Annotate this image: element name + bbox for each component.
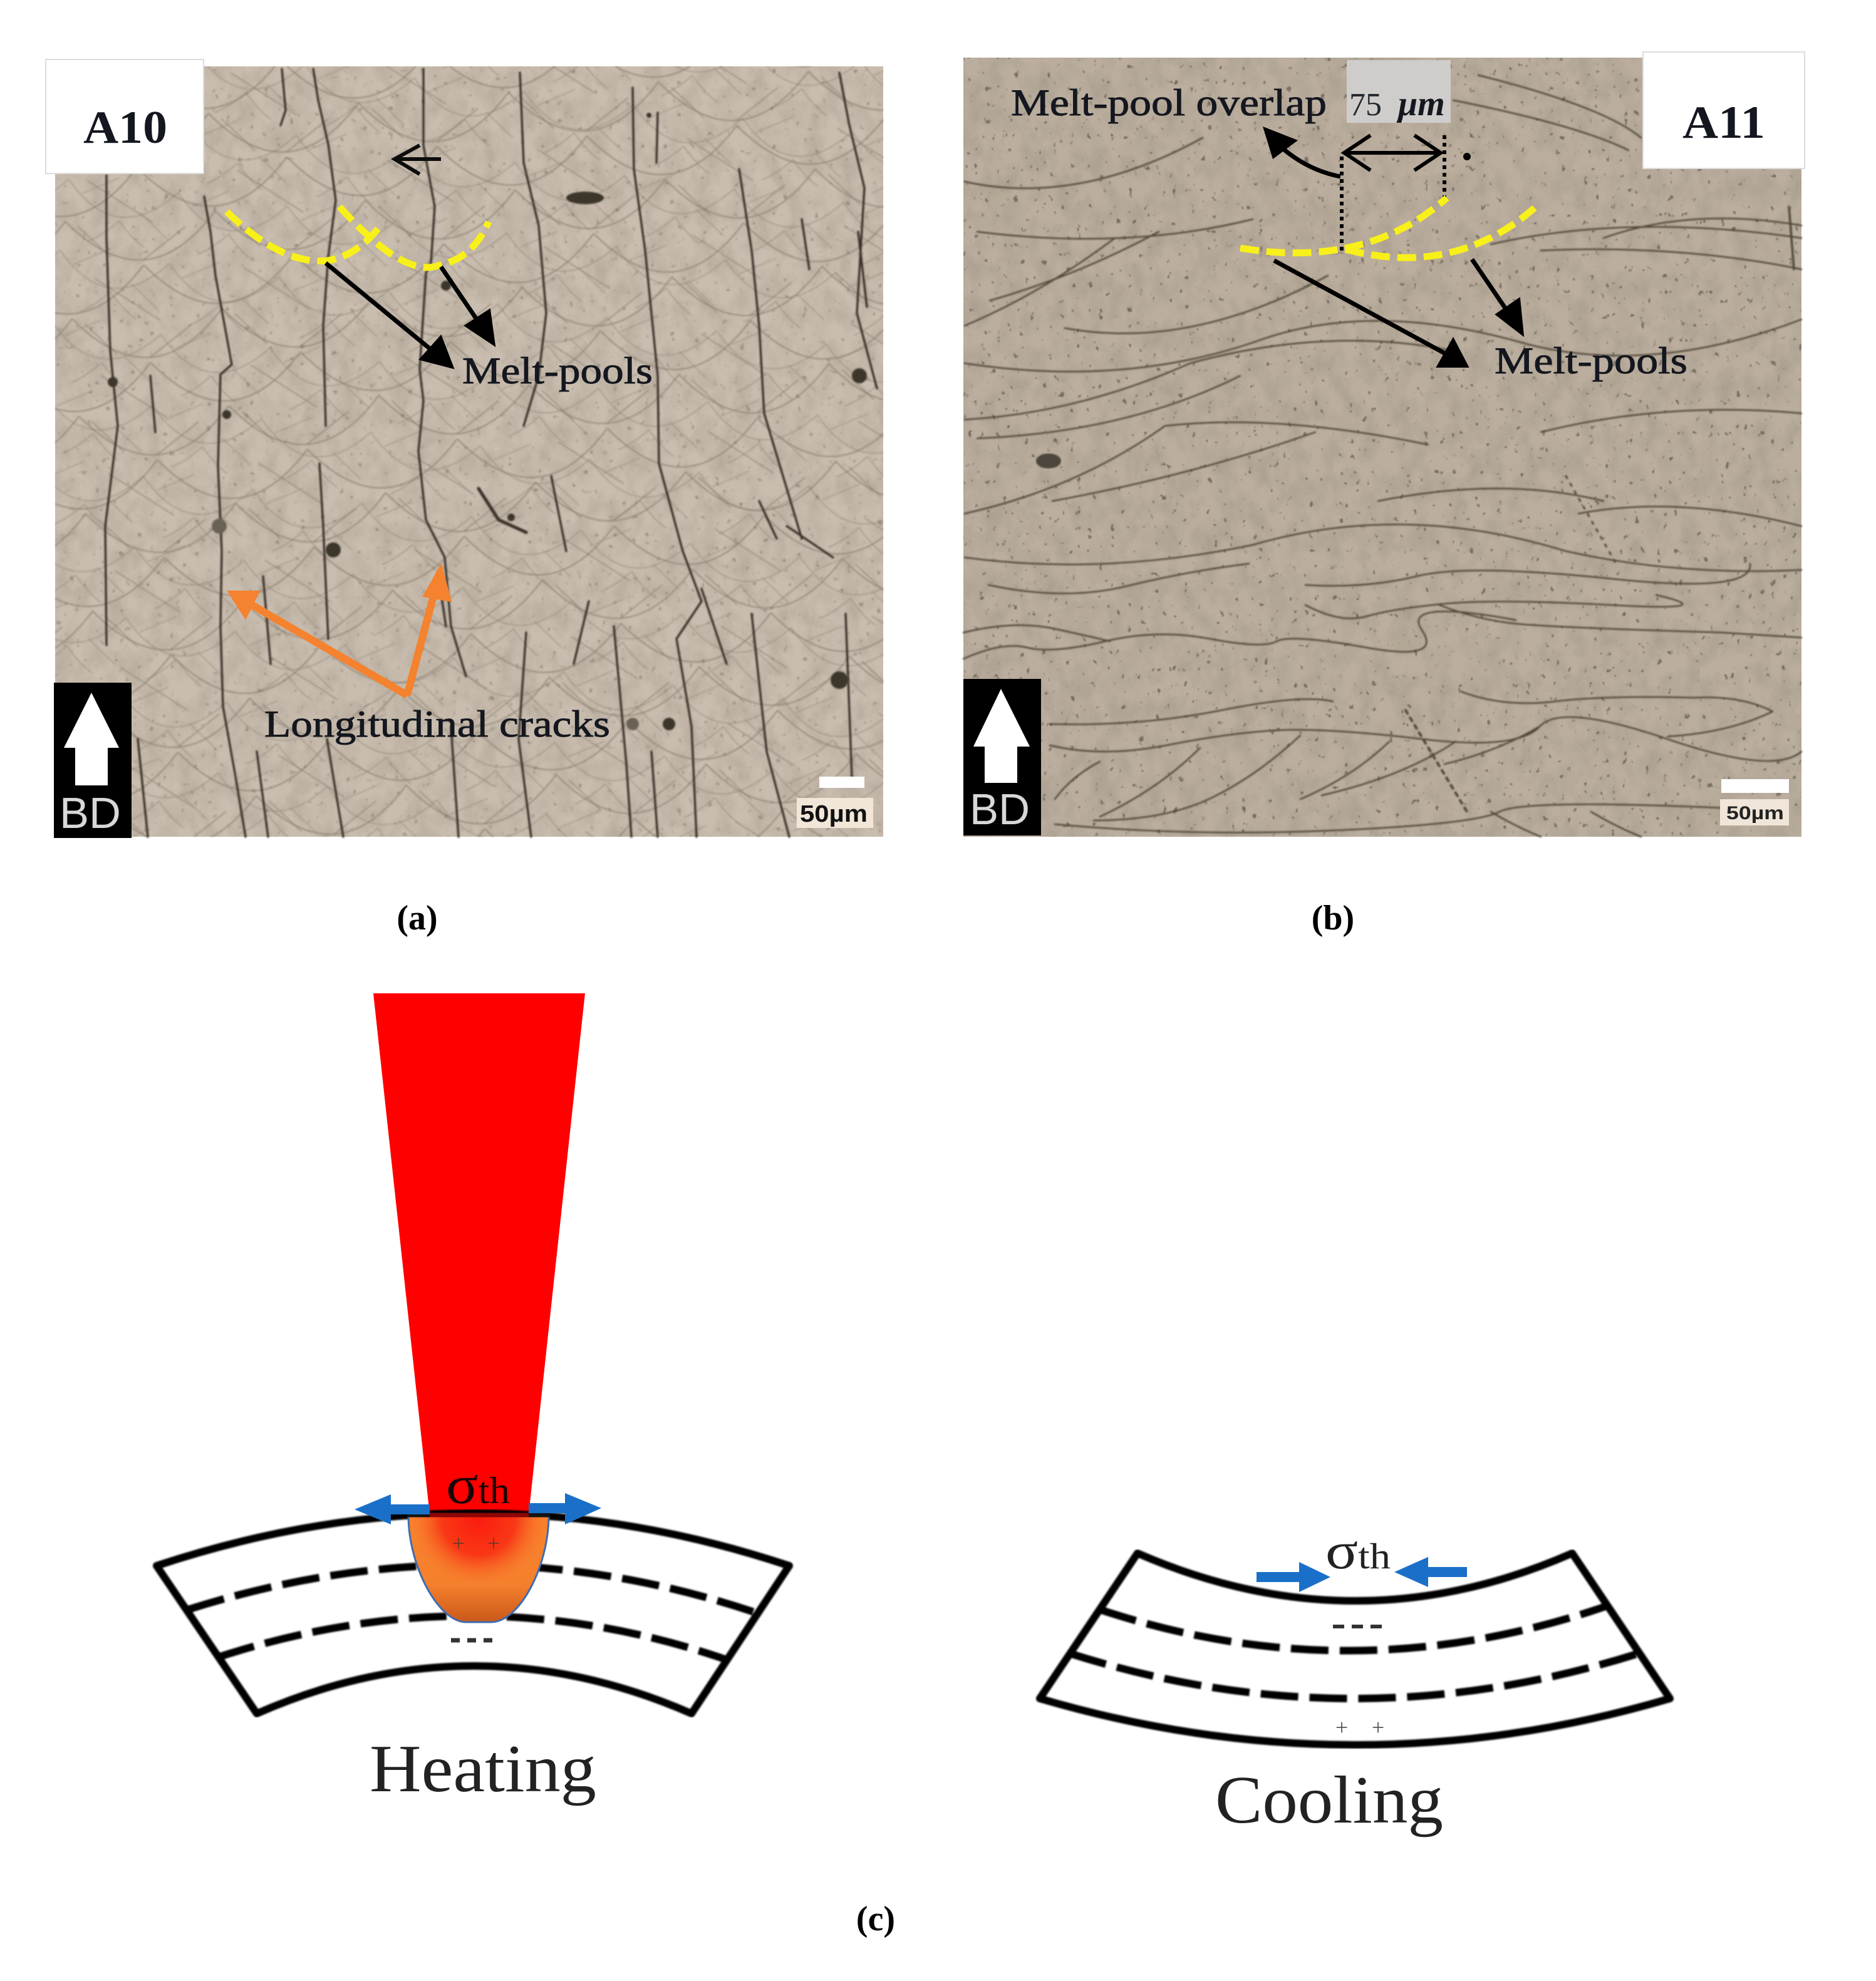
diagram: heating <box>157 993 789 1806</box>
curved arrow to overlap label <box>1263 127 1340 177</box>
longitudinal crack network <box>105 69 877 837</box>
scale bar 50 µm: 50µm <box>800 801 868 827</box>
melt-pool boundary lines <box>963 75 1801 837</box>
pits and inclusions <box>108 113 867 730</box>
overlap width box: 75 µm: 75 <box>1349 87 1382 123</box>
scale bar 50 µm <box>1720 779 1789 825</box>
label: A11 <box>1643 52 1805 168</box>
charges in melt pool: + <box>452 1531 465 1556</box>
text: Melt-pools: Melt-pools <box>462 350 653 391</box>
label: A11: A11 <box>1682 97 1765 148</box>
compressive charge marks <box>1333 1626 1384 1627</box>
panel b: A11 micrograph <box>963 52 1805 837</box>
overlap dimension markers <box>1342 135 1444 253</box>
deposited layers, heating <box>157 1513 789 1714</box>
text: Longitudinal cracks: Longitudinal cracks <box>264 703 610 745</box>
label: A10: A10 <box>83 102 167 153</box>
label: A10 <box>46 59 204 173</box>
text: Melt-pool overlap: Melt-pool overlap <box>1011 82 1327 123</box>
scale bar 50 µm <box>797 777 873 828</box>
text: Heating: Heating <box>370 1732 596 1806</box>
dot <box>1463 153 1471 160</box>
stress symbol: σth <box>1325 1522 1391 1580</box>
charges near base: + <box>1372 1715 1384 1740</box>
build direction badge: BD <box>60 789 121 837</box>
charges near base: + <box>1335 1715 1348 1740</box>
overlap width box: 75 µm <box>1347 60 1451 123</box>
deposited layers, cooling <box>1040 1553 1670 1745</box>
melt-pool boundaries (yellow dashed) <box>227 207 489 267</box>
charges in melt pool: + <box>487 1531 500 1556</box>
caption (c): (c) <box>856 1900 895 1938</box>
build direction badge: BD <box>970 785 1030 834</box>
arrows to melt-pools <box>1274 259 1523 367</box>
diagram: cooling <box>1040 1522 1670 1838</box>
build direction badge <box>54 683 132 838</box>
panel a: A10 micrograph <box>46 59 883 838</box>
caption (b): (b) <box>1312 899 1354 938</box>
compressive arrows <box>1257 1557 1467 1592</box>
text: Cooling: Cooling <box>1215 1763 1443 1838</box>
arrows to melt-pools <box>326 263 495 368</box>
micrograph surface A10 <box>55 66 883 837</box>
tensile arrows <box>355 1493 601 1524</box>
melt pool <box>407 1515 550 1622</box>
icon: small left arrow <box>395 145 441 174</box>
melt-pool boundaries (yellow dashed) <box>1240 198 1535 257</box>
overlap width box: 75 µm: μm <box>1396 85 1445 123</box>
micrograph surface A11 <box>963 58 1801 837</box>
text: Melt-pools: Melt-pools <box>1495 340 1687 381</box>
caption (a): (a) <box>396 899 438 938</box>
orange arrows to longitudinal cracks <box>228 565 451 695</box>
laser beam <box>373 993 585 1514</box>
scale bar 50 µm: 50µm <box>1726 803 1784 824</box>
stress symbol: σth <box>446 1455 510 1516</box>
build direction badge <box>963 679 1041 835</box>
pit <box>1036 453 1061 468</box>
compressive charge marks <box>451 1639 497 1642</box>
